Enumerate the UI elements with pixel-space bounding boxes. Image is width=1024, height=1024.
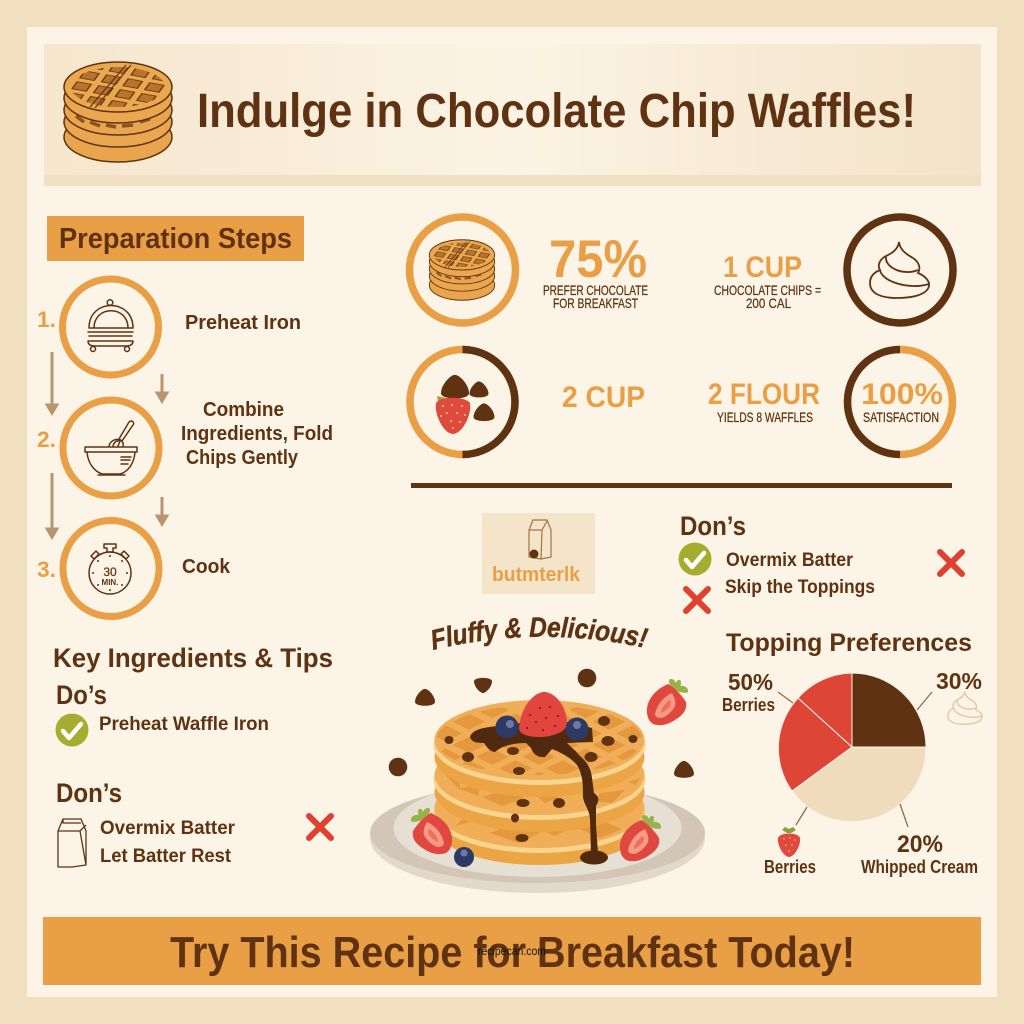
arrows: step 2 to 3: [46, 473, 168, 539]
heading: preparation steps: [47, 216, 304, 261]
illustration: waffle stack on plate: [370, 669, 705, 893]
icon: mixing bowl: [85, 421, 137, 475]
icon: waffle iron: [88, 300, 133, 352]
right don'ts list: Don’s: [680, 511, 746, 541]
icon: stopwatch: 30: [103, 565, 117, 579]
bottom banner: [43, 917, 981, 985]
step 3: [37, 520, 231, 616]
step 1: 1.: [37, 307, 56, 332]
label: berries with strawberry: [764, 827, 816, 877]
label: 20 percent whipped cream: [861, 831, 978, 877]
right don'ts list: [678, 511, 962, 611]
label: 50 percent berries: Berries: [722, 695, 775, 715]
do's list: Do’s: [56, 680, 107, 710]
do's list: [56, 680, 269, 746]
stat: 1 cup: [714, 217, 953, 323]
heading: preparation steps: Preparation Steps: [59, 223, 292, 255]
bottom banner: Try This Recipe for Breakfast Today!: [170, 928, 855, 977]
blueberries: [454, 716, 588, 867]
panel: key ingredients and tips: [53, 643, 333, 867]
don'ts list: Don’s: [56, 778, 122, 808]
icon: stopwatch: MIN.: [102, 578, 118, 587]
stat: 2 flour: 2 FLOUR: [708, 378, 820, 411]
step 1: [37, 279, 301, 375]
stat: 2 cup: [410, 350, 645, 455]
buttermilk card: [482, 513, 595, 594]
strawberry slices: [411, 679, 688, 861]
icon: stopwatch: [89, 544, 131, 594]
step 2: 2.: [37, 427, 56, 452]
label: 30 percent: [936, 668, 982, 724]
slogan: fluffy and delicious: Fluffy & Delicious!: [432, 616, 649, 650]
top strawberry: [519, 692, 567, 737]
icon: chips and strawberry: [436, 375, 494, 434]
stat: 1 cup: CHOCOLATE CHIPS =: [714, 282, 821, 298]
step 2: Chips Gently: [186, 447, 299, 469]
icon: waffle stack: [64, 62, 172, 162]
step 2: [37, 399, 333, 496]
panel: statistics: [410, 217, 953, 455]
label: berries with strawberry: Berries: [764, 857, 816, 877]
pie chart: [778, 673, 926, 822]
don'ts list: [56, 778, 331, 867]
stat: 75 percent: FOR BREAKFAST: [553, 295, 638, 311]
step 1: Preheat Iron: [185, 312, 301, 334]
stat: 75 percent: [410, 217, 648, 323]
buttermilk card: butmterlk: [492, 564, 581, 586]
header banner: [44, 44, 981, 186]
panel: preparation steps: [37, 216, 333, 616]
leader lines: [778, 692, 932, 827]
title: Indulge in Chocolate Chip Waffles!: [197, 85, 916, 138]
don'ts list: Let Batter Rest: [100, 846, 232, 867]
stat: 100 percent: SATISFACTION: [863, 409, 939, 425]
chocolate chips on waffle: [444, 716, 638, 842]
do's list: Preheat Waffle Iron: [99, 714, 269, 735]
right don'ts list: Overmix Batter: [726, 550, 854, 571]
stat: 75 percent: PREFER CHOCOLATE: [543, 282, 648, 298]
heading: key ingredients: Key Ingredients & Tips: [53, 643, 333, 673]
step 3: Cook: [182, 556, 231, 578]
step 2: Ingredients, Fold: [181, 423, 333, 445]
label: 50 percent berries: 50%: [728, 669, 773, 695]
stat: 2 flour: [708, 378, 820, 425]
flying chips: [389, 669, 694, 778]
stat: 1 cup: 1 CUP: [723, 251, 802, 284]
waffle layers: [434, 700, 646, 865]
arrows: step 1 to 2: [46, 352, 168, 415]
step 3: 3.: [37, 557, 56, 582]
stat: 75 percent: 75%: [549, 230, 647, 289]
stat: 1 cup: 200 CAL: [746, 295, 791, 311]
stat: 100 percent: [848, 350, 952, 455]
stat: 2 cup: 2 CUP: [562, 381, 645, 414]
label: 20 percent whipped cream: 20%: [897, 831, 943, 858]
label: 50 percent berries: [722, 669, 775, 715]
step 2: Combine: [203, 399, 284, 421]
label: 30 percent: 30%: [936, 668, 982, 694]
watermark: recipecan.com: [478, 944, 546, 958]
panel: topping preferences: [722, 629, 982, 877]
right don'ts list: Skip the Toppings: [725, 577, 875, 598]
stat: 100 percent: 100%: [861, 378, 943, 411]
heading: topping preferences: Topping Preferences: [726, 629, 972, 657]
label: 20 percent whipped cream: Whipped Cream: [861, 857, 978, 877]
stat: 2 flour: YIELDS 8 WAFFLES: [717, 409, 813, 425]
chocolate drizzle: [470, 722, 608, 864]
plate: [370, 779, 705, 893]
don'ts list: Overmix Batter: [100, 818, 236, 839]
